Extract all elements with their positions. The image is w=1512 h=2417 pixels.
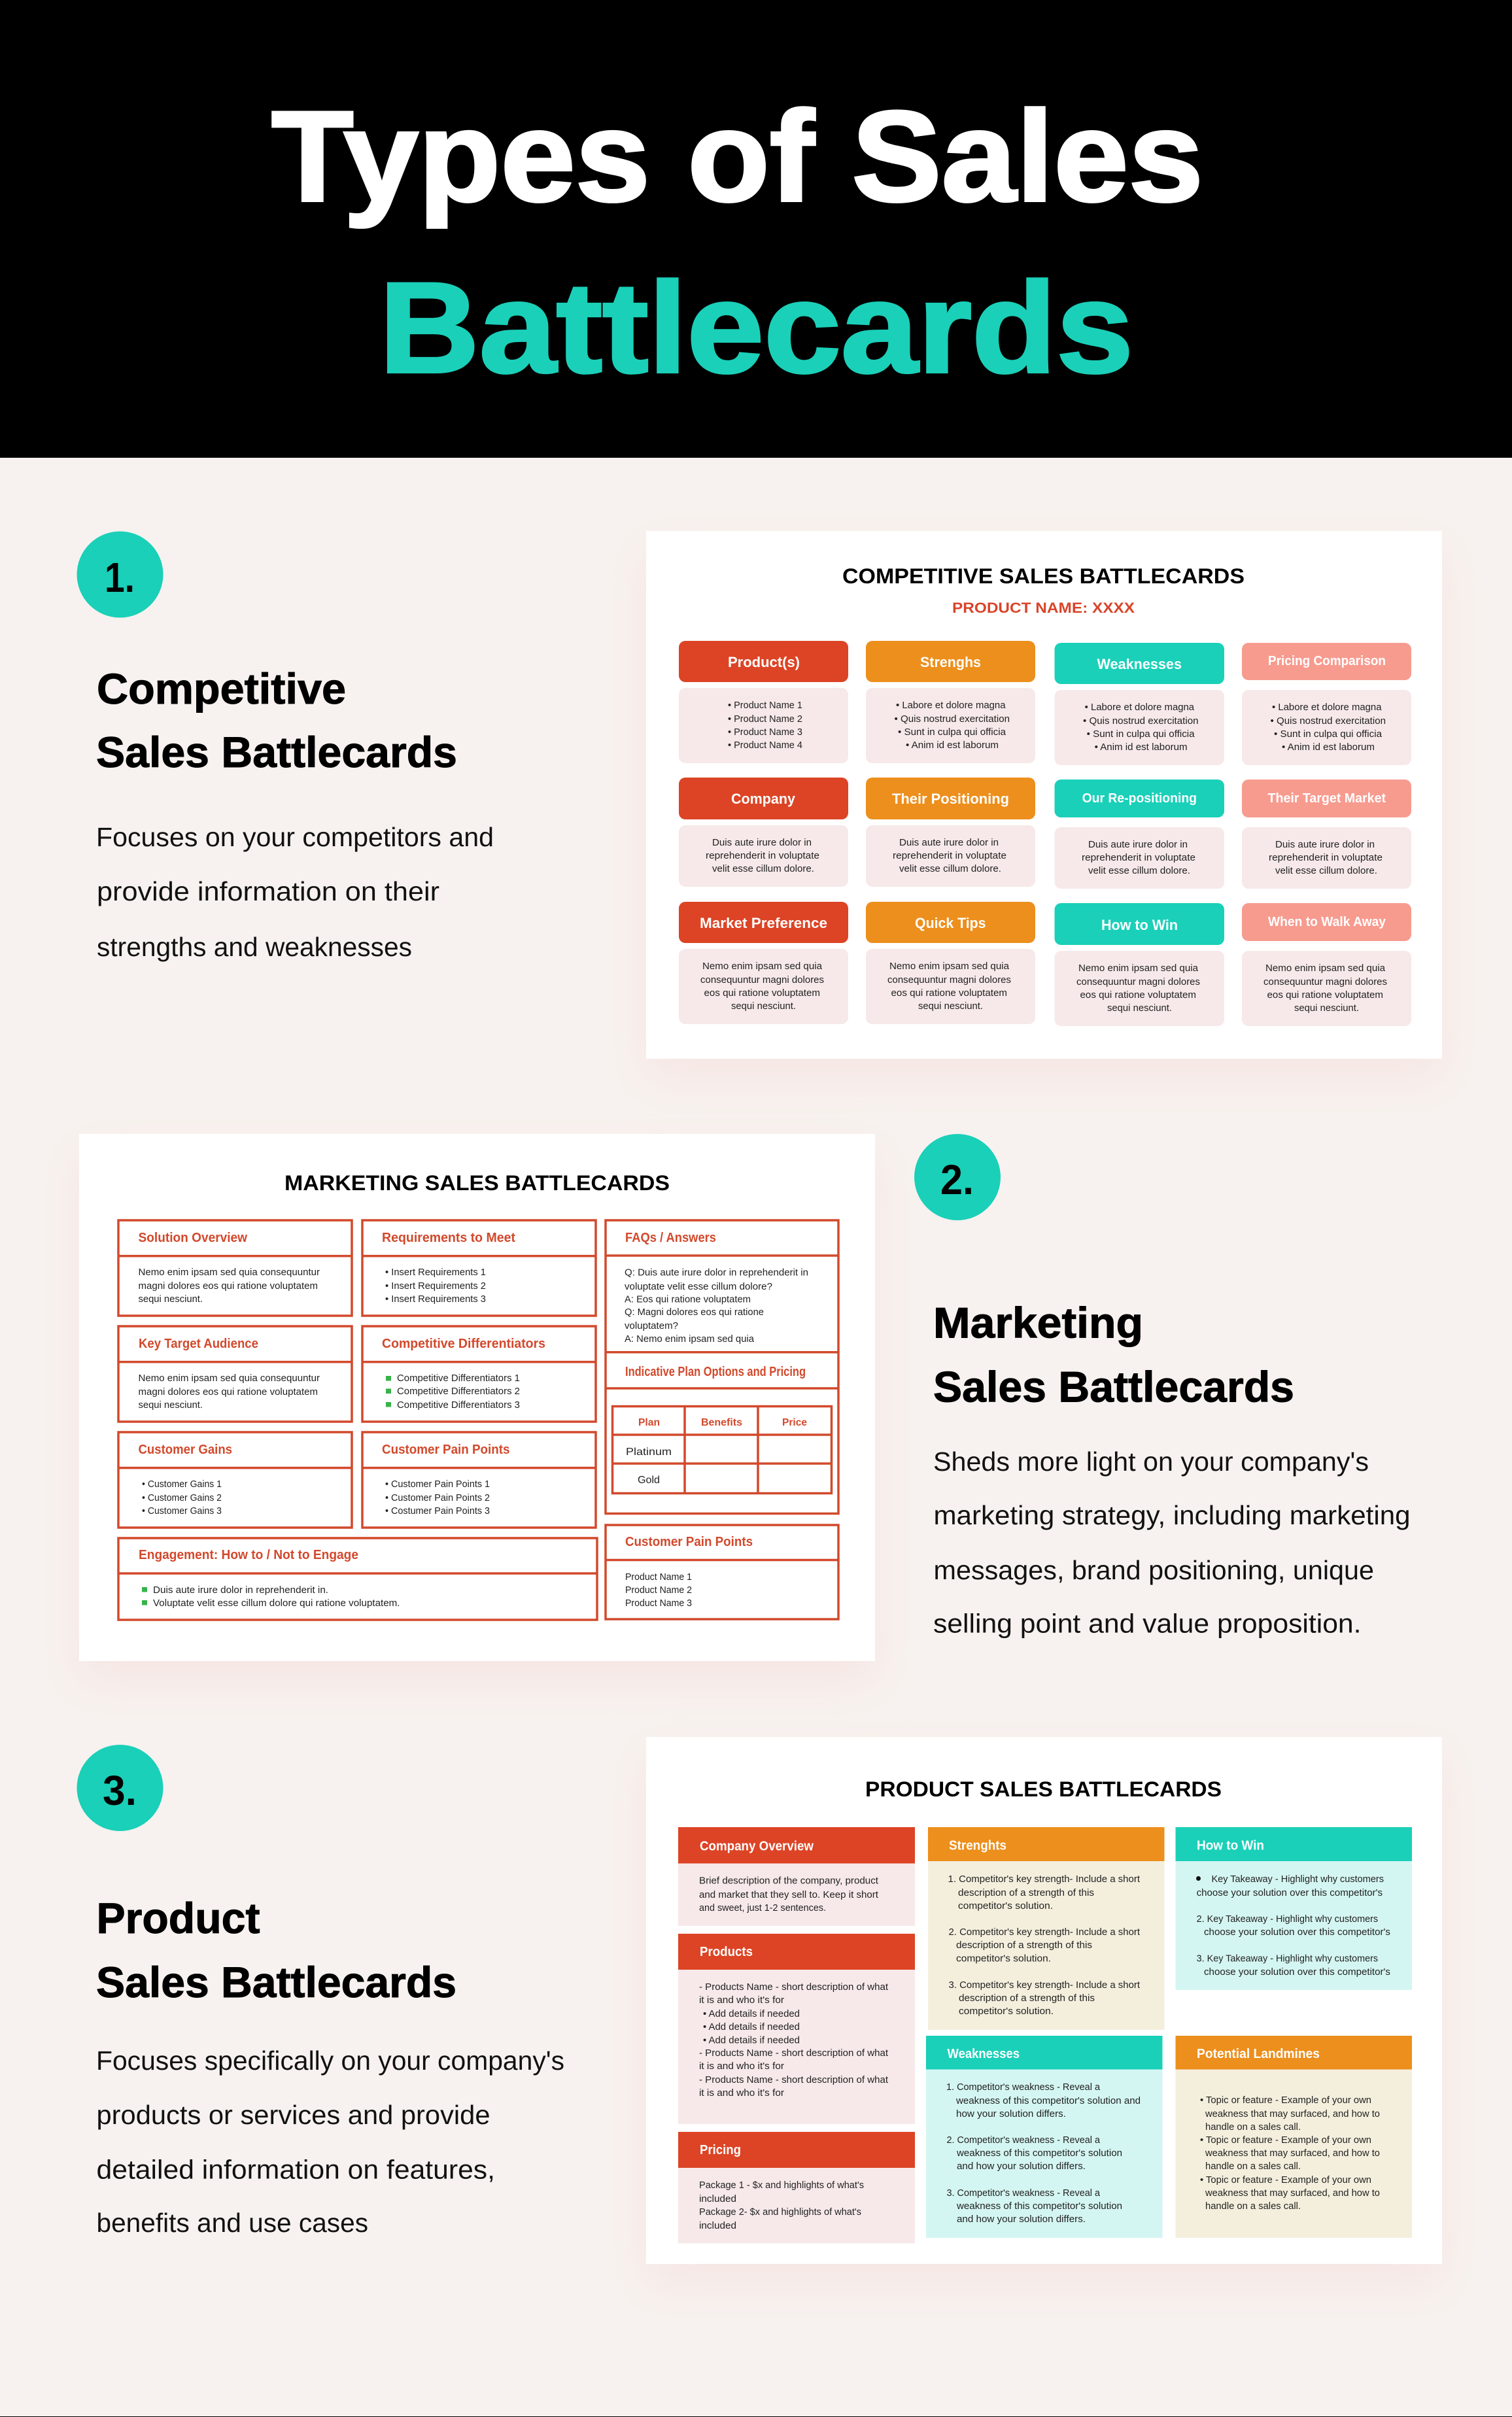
block: Pricing: included [699,2194,736,2204]
block: Potential Landmines: • Topic or feature - Example of your own [1200,2175,1371,2186]
box: Competitive Differentiators: Competitive Differentiators 3 [397,1400,520,1411]
block: Strengths: 2. Competitor's key strength- Include a short [948,1927,1140,1938]
box: Key Target Audience: magni dolores eos qui ratione voluptatem [139,1387,318,1397]
pricing table: Benefits [701,1417,742,1428]
block: Potential Landmines: handle on a sales call. [1205,2201,1301,2212]
box: Customer Gains: Customer Gains [139,1443,232,1457]
section 3 intro: Product Sales Battlecards [77,1745,564,2238]
FAQs / Answers: A: Eos qui ratione voluptatem [625,1295,751,1305]
cell: Product(s): • Product Name 3 [728,727,802,738]
block: Strengths: 1. Competitor's key strength- Include a short [948,1874,1140,1885]
cell: How to Win [1054,903,1224,1026]
description text 2: marketing strategy, including marketing [934,1500,1410,1530]
block: How to Win: 2. Key Takeaway - Highlight why customers [1197,1914,1378,1925]
cell: Weaknesses [1054,643,1224,765]
box: Competitive Differentiators: Competitive Differentiators 2 [397,1386,520,1397]
cell: Company: Duis aute irure dolor in [712,838,812,848]
cell: Company [679,778,848,887]
cell: When to Walk Away: sequi nesciunt. [1294,1003,1359,1014]
cell: Quick Tips [866,902,1035,1024]
description text 3: Focuses specifically on your company's [96,2046,564,2076]
cell: Strengths: • Quis nostrud exercitation [895,714,1010,725]
box: Customer Pain Points: • Costumer Pain Points 3 [385,1506,490,1517]
cell: Their Positioning: Their Positioning [892,791,1009,807]
pricing table: Platinum [626,1447,672,1458]
block: Potential Landmines: weakness that may surfaced, and how to [1205,2109,1380,2119]
cell: Their Target Market: Duis aute irure dolor in [1275,840,1375,850]
box: Key Target Audience [118,1326,352,1422]
cell: Market Preference: Market Preference [700,915,827,931]
heading: Product Sales Battlecards: Sales Battlecards [96,1958,456,2006]
cell: Strengths: • Anim id est laborum [906,740,999,751]
block: Strengths: 3. Competitor's key strength- Include a short [948,1980,1140,1991]
cell: When to Walk Away: Nemo enim ipsam sed quia [1265,963,1386,974]
number badge 2: 2. [940,1156,974,1203]
box: Customer Gains: • Customer Gains 1 [142,1479,222,1490]
cell: Our Re-positioning: reprehenderit in voluptate [1082,853,1195,863]
cell: Market Preference: eos qui ratione voluptatem [704,988,820,999]
block: Products: • Add details if needed [703,2022,800,2032]
cell: How to Win: Nemo enim ipsam sed quia [1078,963,1199,974]
cell: When to Walk Away: consequuntur magni dolores [1263,977,1387,987]
box: Customer Pain Points [362,1432,596,1528]
block: Weaknesses: and how your solution differs. [957,2214,1086,2225]
number badge 1: 1. [105,554,135,601]
block: How to Win: Key Takeaway - Highlight why customers [1211,1874,1384,1885]
box: Solution Overview: Solution Overview [139,1231,247,1245]
block: How to Win: choose your solution over this competitor's [1204,1927,1390,1938]
number badge 3 [77,1745,163,1831]
box: Engagement: Duis aute irure dolor in reprehenderit in. [153,1585,328,1596]
FAQs / Answers: Q: Magni dolores eos qui ratione [625,1307,764,1318]
cell: How to Win: How to Win [1101,917,1178,933]
box: Solution Overview: Nemo enim ipsam sed quia consequuntur [139,1267,320,1278]
heading: Marketing Sales Battlecards: Sales Battlecards [933,1363,1294,1411]
description text 1: Focuses on your competitors and [96,822,494,852]
block: Weaknesses: weakness of this competitor's solution [956,2148,1122,2159]
heading: Product Sales Battlecards: Product [97,1894,260,1942]
panel: product sales battlecard [646,1737,1442,2264]
pricing table: Price [782,1417,807,1428]
box: Key Target Audience: Nemo enim ipsam sed quia consequuntur [139,1373,320,1384]
block: Company Overview: Company Overview [700,1839,814,1853]
block: Products: it is and who it's for [699,2061,784,2072]
block: Products: - Products Name - short description of what [699,2075,888,2085]
cell: Pricing Comparison [1242,643,1411,765]
block: Pricing [678,2132,915,2243]
cell: Our Re-positioning: Our Re-positioning [1082,791,1197,806]
cell: Strengths: • Sunt in culpa qui officia [898,727,1006,738]
box: Customer Pain Points (products) [606,1525,838,1619]
description text 3: products or services and provide [97,2100,490,2130]
box: Customer Gains: • Customer Gains 3 [142,1506,222,1517]
block: Products [678,1934,915,2124]
section 2 intro: Marketing Sales Battlecards [914,1134,1410,1639]
cell: Their Target Market: Their Target Market [1267,791,1386,806]
block: How to Win: 3. Key Takeaway - Highlight why customers [1197,1954,1378,1964]
cell: Their Positioning: reprehenderit in voluptate [893,851,1006,861]
block: Weaknesses: how your solution differs. [956,2109,1066,2119]
cell: Quick Tips: sequi nesciunt. [918,1001,983,1012]
description text 3: benefits and use cases [97,2208,368,2238]
cell: Weaknesses: • Anim id est laborum [1095,742,1188,753]
cell: Weaknesses: Weaknesses [1097,656,1182,672]
block: Products: • Add details if needed [703,2035,800,2046]
cell: Our Re-positioning: velit esse cillum dolore. [1088,866,1190,876]
description text 3: detailed information on features, [97,2154,495,2184]
block: Company Overview [678,1827,915,1926]
box: Customer Pain Points: • Customer Pain Points 1 [385,1479,490,1490]
cell: Product(s): • Product Name 2 [728,714,802,725]
cell: Market Preference: sequi nesciunt. [731,1001,796,1012]
box: Competitive Differentiators: Competitive Differentiators 1 [397,1373,520,1384]
cell: Pricing Comparison: • Quis nostrud exercitation [1270,716,1386,727]
block: Products: it is and who it's for [699,1995,784,2006]
block: Products: - Products Name - short description of what [699,2048,888,2059]
box: Requirements to Meet: • Insert Requirements 3 [385,1294,486,1305]
box: Customer Pain Points (products): Customer Pain Points [625,1535,753,1549]
box: Key Target Audience: sequi nesciunt. [139,1400,203,1411]
cell: Strengths: • Labore et dolore magna [896,700,1006,711]
cell: How to Win: consequuntur magni dolores [1076,977,1200,987]
block: Products: Products [700,1945,753,1959]
FAQs / Answers: Q: Duis aute irure dolor in reprehenderit in [625,1267,808,1278]
block: Pricing: Pricing [700,2143,741,2157]
block: Company Overview: and sweet, just 1-2 sentences. [699,1903,826,1913]
heading: Marketing Sales Battlecards [933,1299,1294,1411]
cell: Their Positioning: Duis aute irure dolor in [899,838,999,848]
block: How to Win: choose your solution over this competitor's [1197,1888,1383,1898]
box: Customer Pain Points (products): Product Name 2 [625,1585,692,1596]
description text 2: messages, brand positioning, unique [934,1555,1374,1585]
cell: When to Walk Away: eos qui ratione voluptatem [1267,990,1383,1001]
heading: Competitive Sales Battlecards: Competitive [97,664,346,713]
cell: Market Preference: Nemo enim ipsam sed quia [702,961,823,972]
block: Potential Landmines: handle on a sales call. [1205,2161,1301,2172]
card title: PRODUCT SALES BATTLECARDS [865,1777,1222,1801]
block: How to Win: choose your solution over this competitor's [1204,1967,1390,1978]
block: Weaknesses: 3. Competitor's weakness - Reveal a [947,2188,1101,2199]
box: Requirements to Meet: • Insert Requirements 1 [385,1267,486,1278]
title line: Battlecards: Battlecards [379,256,1133,400]
FAQs / Answers: A: Nemo enim ipsam sed quia [625,1334,755,1345]
box: Requirements to Meet: Requirements to Meet [382,1231,515,1245]
block: Strengths: Strenghts [949,1839,1006,1853]
pricing table [612,1406,832,1494]
cell: Weaknesses: • Labore et dolore magna [1085,702,1195,713]
block: Weaknesses: weakness of this competitor's solution and [955,2096,1141,2106]
box: Requirements to Meet: • Insert Requirements 2 [385,1281,486,1292]
block: Weaknesses: 1. Competitor's weakness - Reveal a [946,2082,1101,2093]
block: Potential Landmines: weakness that may surfaced, and how to [1205,2148,1380,2159]
description text 1: strengths and weaknesses [97,932,412,962]
cell: Weaknesses: • Sunt in culpa qui officia [1087,729,1195,740]
block: Strengths: competitor's solution. [958,1901,1053,1911]
heading: Marketing Sales Battlecards: Marketing [933,1299,1143,1347]
box: Engagement: Engagement: How to / Not to Engage [139,1548,358,1562]
pricing table: Gold [638,1475,660,1486]
FAQs / Answers: voluptate velit esse cillum dolore? [625,1282,772,1292]
cell: When to Walk Away: When to Walk Away [1268,915,1386,929]
card title: COMPETITIVE SALES BATTLECARDS [842,564,1245,588]
cell: Their Positioning [866,778,1035,887]
block: Weaknesses: 2. Competitor's weakness - Reveal a [947,2135,1101,2146]
box: Competitive Differentiators [362,1326,596,1422]
block: Weaknesses: and how your solution differs. [957,2161,1086,2172]
block: Pricing: Package 1 - $x and highlights of what's [699,2180,864,2191]
cell: Company: reprehenderit in voluptate [706,851,819,861]
block: Strengths: competitor's solution. [959,2006,1054,2017]
cell: Product(s): • Product Name 1 [728,700,802,711]
heading: Competitive Sales Battlecards [96,664,457,776]
block: Strengths: description of a strength of this [956,1940,1092,1951]
pricing table: Plan [638,1417,660,1428]
cell: Strengths: Strenghs [920,654,981,670]
box: Customer Gains: • Customer Gains 2 [142,1493,222,1503]
block: Potential Landmines [1176,2036,1412,2238]
box: Key Target Audience: Key Target Audience [139,1337,258,1351]
block: Company Overview: and market that they sell to. Keep it short [699,1890,878,1900]
panel: competitive sales battlecard [646,531,1442,1059]
FAQs / Answers: FAQs / Answers [625,1231,716,1245]
box: Solution Overview [118,1220,352,1316]
number badge 3: 3. [103,1767,137,1814]
box: Solution Overview: magni dolores eos qui ratione voluptatem [139,1281,318,1292]
cell: Company: Company [731,791,796,807]
box: Customer Pain Points: • Customer Pain Points 2 [385,1493,490,1503]
box: Competitive Differentiators: Competitive Differentiators [382,1337,545,1351]
block: Weaknesses: weakness of this competitor's solution [956,2201,1122,2212]
cell: Product(s): Product(s) [728,654,800,670]
card subtitle: PRODUCT NAME: XXXX [952,600,1135,616]
box: Customer Gains [118,1432,352,1528]
description text 3 [96,2046,564,2238]
cell: Market Preference [679,902,848,1024]
box: Customer Pain Points (products): Product Name 1 [625,1572,692,1583]
block: Strengths: competitor's solution. [956,1954,1051,1964]
block: Strengths: description of a strength of this [958,1888,1094,1898]
cell: Their Target Market: velit esse cillum dolore. [1275,866,1377,876]
block: Strengths: description of a strength of this [959,1993,1095,2004]
box: Requirements to Meet [362,1220,596,1316]
block: Potential Landmines: handle on a sales call. [1205,2122,1301,2133]
cell: Strengths [866,641,1035,763]
section 1 intro: Competitive Sales Battlecards [77,531,494,962]
cell: When to Walk Away [1242,903,1411,1026]
box: Engagement: Voluptate velit esse cillum dolore qui ratione voluptatem. [153,1598,400,1609]
cell: Pricing Comparison: • Anim id est laborum [1282,742,1375,753]
cell: Company: velit esse cillum dolore. [712,864,814,874]
cell: Quick Tips: Quick Tips [915,915,986,931]
box: Solution Overview: sequi nesciunt. [139,1294,203,1305]
card title: MARKETING SALES BATTLECARDS [284,1171,670,1195]
description text 2: selling point and value proposition. [933,1609,1362,1639]
cell: Our Re-positioning: Duis aute irure dolor in [1088,840,1188,850]
cell: Product(s): • Product Name 4 [728,740,802,751]
heading: Product Sales Battlecards [96,1894,456,2006]
cell: Pricing Comparison: Pricing Comparison [1268,654,1386,668]
description text 1 [96,822,494,962]
block: Pricing: included [699,2221,736,2231]
block: Pricing: Package 2- $x and highlights of what's [699,2207,861,2218]
panel: marketing sales battlecard [79,1134,875,1661]
cell: Quick Tips: consequuntur magni dolores [887,975,1011,986]
block: Potential Landmines: weakness that may surfaced, and how to [1205,2188,1380,2199]
block: How to Win: How to Win [1197,1839,1264,1853]
cell: Pricing Comparison: • Labore et dolore magna [1272,702,1382,713]
description text 1: provide information on their [97,876,439,906]
cell: Their Target Market: reprehenderit in voluptate [1269,853,1383,863]
block: Potential Landmines: • Topic or feature - Example of your own [1200,2135,1371,2146]
cell: Product(s) [679,641,848,763]
box: Engagement [118,1538,597,1620]
Indicative Plan Options and Pricing: Indicative Plan Options and Pricing [625,1365,806,1379]
cell: How to Win: eos qui ratione voluptatem [1080,990,1196,1001]
block: How to Win [1176,1827,1412,1990]
number badge 1 [77,531,163,617]
box: Customer Pain Points (products): Product Name 3 [625,1598,692,1609]
cell: Our Re-positioning [1054,780,1224,889]
cell: Quick Tips: Nemo enim ipsam sed quia [889,961,1010,972]
FAQs / Answers: voluptatem? [625,1321,678,1331]
FAQs / Answers [625,1231,808,1345]
cell: Weaknesses: • Quis nostrud exercitation [1083,716,1198,727]
number badge 2 [914,1134,1001,1220]
cell: Quick Tips: eos qui ratione voluptatem [891,988,1007,999]
cell: Pricing Comparison: • Sunt in culpa qui officia [1274,729,1383,740]
block: Products: • Add details if needed [703,2009,800,2019]
block: Weaknesses: Weaknesses [947,2047,1020,2061]
cell: Their Positioning: velit esse cillum dolore. [899,864,1001,874]
title banner [0,0,1512,458]
description text 2: Sheds more light on your company's [933,1447,1369,1477]
block: Strengths [928,1827,1164,2030]
block: Weaknesses [926,2036,1163,2238]
cell: How to Win: sequi nesciunt. [1107,1003,1172,1014]
block: Products: - Products Name - short description of what [699,1982,888,1993]
block: Products: it is and who it's for [699,2088,784,2099]
cell: Their Target Market [1242,780,1411,889]
cell: Market Preference: consequuntur magni dolores [700,975,824,986]
block: Potential Landmines: Potential Landmines [1197,2047,1320,2061]
box: Customer Pain Points: Customer Pain Points [382,1443,510,1457]
block: Potential Landmines: • Topic or feature - Example of your own [1200,2095,1371,2106]
heading: Competitive Sales Battlecards: Sales Battlecards [96,728,457,776]
description text 2 [933,1447,1410,1639]
title line: Types of Sales: Types of Sales [271,84,1203,228]
box: FAQs and plan pricing [606,1220,838,1513]
block: Company Overview: Brief description of the company, product [699,1876,878,1886]
